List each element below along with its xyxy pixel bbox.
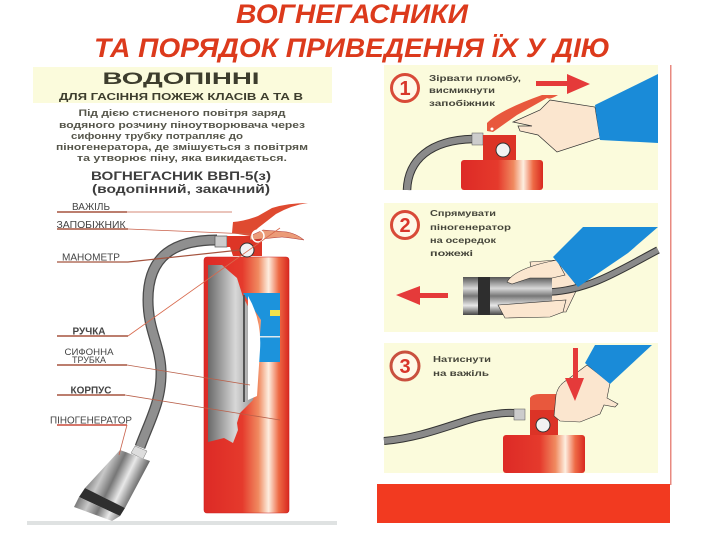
red footer bar	[377, 484, 670, 523]
hose 2	[550, 250, 658, 292]
step 1 text: висмикнути	[429, 85, 495, 95]
part label: handle	[57, 228, 280, 338]
part label: casing: КОРПУС	[70, 386, 112, 396]
hand 3	[554, 345, 652, 422]
hose 3	[384, 413, 515, 441]
hand 2 fingers	[498, 227, 658, 318]
description text: водяного розчину піноутворювача через	[59, 120, 306, 130]
hand 2 back	[530, 260, 578, 312]
step 1 text: запобіжник	[429, 98, 496, 108]
heading band: ВОДОПІННІ	[102, 69, 260, 88]
arrow: pull right	[536, 74, 590, 94]
panel: step 3	[384, 343, 658, 473]
part label: foam generator	[50, 416, 132, 455]
part label: siphon tube: ТРУБКА	[72, 355, 106, 365]
description text: піногенератора, де змішується з повітрям	[56, 142, 308, 152]
step number 2	[392, 212, 418, 238]
part label: siphon tube	[57, 347, 250, 385]
arrow: press down	[565, 348, 584, 401]
step number 2: 2	[399, 215, 411, 237]
extinguisher valve head and levers	[215, 203, 308, 257]
description text: та утворює піну, яка викидається.	[77, 153, 287, 163]
model heading: (водопінний, закачний)	[92, 184, 270, 196]
arrow: direct left	[396, 286, 448, 305]
extinguisher top 3	[503, 394, 585, 473]
step 2 text: на осередок	[430, 235, 497, 245]
step number 3	[391, 352, 419, 380]
description text: Під дією стисненого повітря заряд	[78, 108, 286, 118]
description text: сифонну трубку потрапляє до	[71, 131, 243, 141]
step 1 text	[429, 73, 521, 108]
step number 1: 1	[399, 78, 411, 100]
step 2 text: Спрямувати	[430, 208, 496, 218]
step 2 text: пожежі	[430, 248, 473, 258]
extinguisher top 1	[461, 95, 558, 190]
title: ТА ПОРЯДОК ПРИВЕДЕННЯ ЇХ У ДІЮ	[94, 33, 610, 63]
step 2 text	[430, 208, 511, 258]
title	[94, 0, 610, 63]
part label: siphon tube: СИФОННА	[64, 347, 114, 357]
part label: lever: ВАЖІЛЬ	[72, 202, 110, 213]
part label: safety pin	[56, 220, 250, 234]
step 3 text: на важіль	[433, 368, 489, 378]
step number 1	[392, 74, 418, 102]
model heading: ВОГНЕГАСНИК ВВП-5(з)	[91, 171, 271, 183]
panel: foam extinguisher diagram	[27, 67, 337, 525]
heading band	[33, 67, 332, 103]
step number 3: 3	[399, 356, 411, 378]
ground line	[27, 521, 337, 525]
step 3 text	[433, 354, 491, 378]
right border line	[670, 65, 672, 485]
step 2 text: піногенератор	[430, 222, 511, 232]
panel: step 2	[384, 203, 658, 332]
hose 1	[407, 139, 473, 190]
part label: casing	[57, 386, 280, 420]
nozzle 2	[463, 277, 552, 315]
panel: step 1	[384, 65, 658, 190]
part label: gauge: МАНОМЕТР	[62, 252, 120, 264]
step 3 text: Натиснути	[433, 354, 491, 364]
part label: safety pin: ЗАПОБІЖНИК	[56, 220, 126, 231]
part label: gauge	[57, 250, 240, 264]
extinguisher body	[204, 257, 289, 513]
hand 1	[513, 74, 658, 152]
part label: foam generator: ПІНОГЕНЕРАТОР	[50, 416, 132, 426]
part label: handle: РУЧКА	[72, 326, 106, 338]
description text	[56, 108, 308, 163]
heading band: ДЛЯ ГАСІННЯ ПОЖЕЖ КЛАСІВ А ТА В	[59, 92, 303, 103]
model heading	[91, 171, 271, 196]
step 1 text: Зірвати пломбу,	[429, 73, 521, 83]
foam generator nozzle	[74, 446, 150, 521]
extinguisher hose	[140, 240, 217, 447]
